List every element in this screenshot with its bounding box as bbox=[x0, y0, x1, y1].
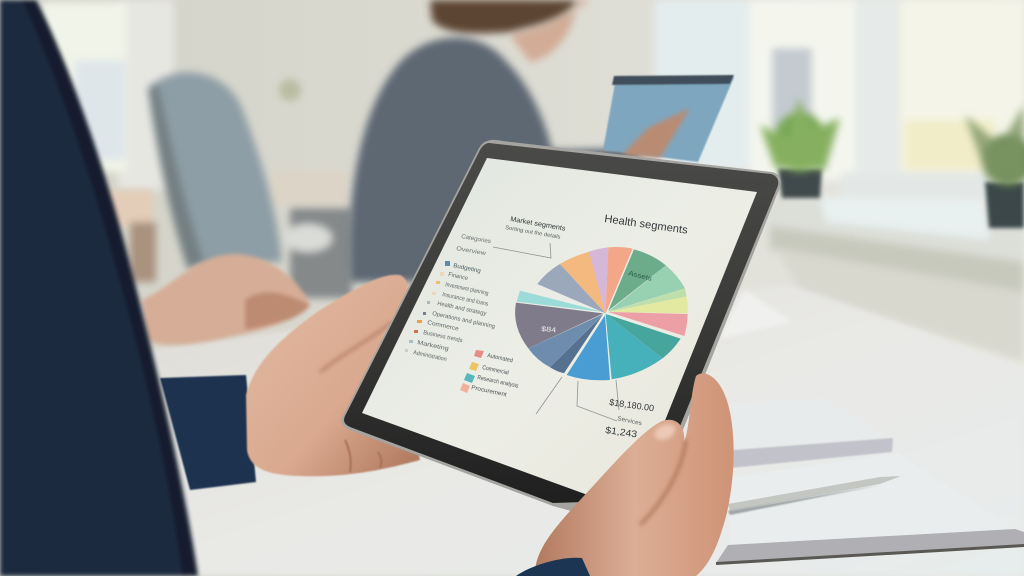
tablet body bbox=[342, 140, 781, 530]
pie label text: Overview bbox=[456, 246, 487, 257]
pie label text bbox=[456, 213, 689, 440]
window sill bbox=[765, 197, 1024, 362]
legend: lower list: Commercial bbox=[482, 365, 509, 377]
left hand bbox=[246, 275, 420, 476]
plant: middle bbox=[760, 98, 840, 198]
legend: left list: Investment planning bbox=[445, 282, 489, 297]
pie label text: Sorting out the details bbox=[505, 225, 561, 241]
legend: lower list: Procurement bbox=[471, 385, 507, 399]
sleeve: left arm bbox=[160, 375, 256, 490]
suit shoulder foreground bbox=[0, 0, 198, 576]
pie label text: $1,243 bbox=[605, 425, 638, 440]
notebook page bbox=[727, 453, 1013, 545]
head bbox=[510, 0, 590, 62]
legend: left list: Operations and planning bbox=[432, 311, 495, 330]
background tablet bbox=[603, 75, 734, 162]
pie chart leader lines bbox=[493, 243, 619, 421]
tablet screen bbox=[362, 158, 757, 510]
table bbox=[150, 285, 1024, 576]
thumb crease bbox=[320, 322, 392, 372]
furniture behind bbox=[108, 170, 352, 298]
stacked papers bbox=[730, 398, 893, 450]
legend: left list: Administration bbox=[413, 350, 447, 363]
pie label text: Assets bbox=[628, 270, 653, 283]
pie chart bbox=[515, 247, 688, 380]
pie label text: $18,180.00 bbox=[609, 397, 655, 413]
legend: lower list: Automated bbox=[487, 353, 513, 364]
pie label text: Services bbox=[617, 416, 642, 427]
finger crease bbox=[640, 440, 686, 525]
legend: lower list bbox=[460, 350, 519, 399]
sleeve: right arm bbox=[516, 558, 590, 576]
legend: left list: Insurance and loans bbox=[442, 292, 489, 308]
papers on table, back bbox=[720, 290, 792, 338]
back hand bbox=[142, 254, 310, 345]
chair bbox=[148, 72, 282, 270]
hair bbox=[430, 0, 578, 33]
legend: left list: Budgeting bbox=[453, 263, 481, 275]
pie label text: Health segments bbox=[604, 213, 689, 237]
legend: left list: Health and strategy bbox=[437, 301, 487, 317]
legend: left list: Finance bbox=[448, 272, 469, 282]
thumb nail highlight bbox=[652, 421, 678, 443]
pie label text: Categories bbox=[461, 234, 491, 245]
legend: left list: Marketing bbox=[417, 340, 449, 353]
plant: right bbox=[965, 105, 1024, 228]
legend: left list: Commerce bbox=[427, 320, 460, 333]
legend: left list: Business trends bbox=[423, 330, 463, 344]
finger creases bbox=[345, 440, 381, 472]
wall ornament bbox=[279, 79, 301, 101]
pie label text: $84 bbox=[541, 326, 557, 334]
notebook spiral edge bbox=[716, 529, 1024, 563]
background person bbox=[349, 0, 640, 282]
notebook and pen bbox=[716, 398, 1024, 565]
torso bbox=[349, 38, 640, 282]
tablet bbox=[342, 140, 781, 530]
right hand bbox=[535, 373, 734, 576]
window: left bbox=[42, 0, 174, 190]
pie label text: Market segments bbox=[510, 216, 567, 233]
window: right bbox=[655, 0, 1024, 200]
legend: left list bbox=[405, 261, 495, 363]
legend: lower list: Research analysis bbox=[477, 375, 519, 390]
pen bbox=[728, 476, 901, 511]
